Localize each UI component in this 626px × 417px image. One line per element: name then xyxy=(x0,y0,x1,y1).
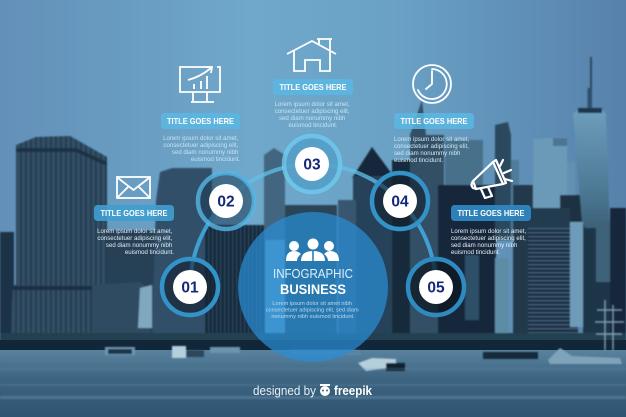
description text: sed diam nonummy nibh xyxy=(279,115,345,122)
footer: designed by freepik credit: freepik xyxy=(334,384,372,398)
description text: consectetuer adipiscing elit, xyxy=(451,235,526,242)
description text: Lorem ipsum dolor sit amet, xyxy=(163,135,239,142)
step 05 node: 05 xyxy=(427,280,445,296)
footer: designed by freepik credit xyxy=(253,384,372,398)
central description text: consectetuer adipiscing elit, sed diam xyxy=(266,308,359,314)
panel: step 04 clock xyxy=(394,65,474,164)
title pill: TITLE GOES HERE xyxy=(280,82,347,92)
step 05 node xyxy=(408,259,464,315)
icon: envelope xyxy=(117,177,150,198)
description text: Lorem ipsum dolor sit amet, xyxy=(97,228,173,235)
title pill: TITLE GOES HERE xyxy=(167,116,234,126)
description text: consectetuer adipiscing elit, xyxy=(163,142,239,149)
icon: megaphone xyxy=(472,160,512,198)
step 04 node: 04 xyxy=(391,194,409,210)
heading: business: BUSINESS xyxy=(280,281,346,297)
footer: designed by freepik credit: designed by xyxy=(253,384,317,398)
description text: euismod tincidunt. xyxy=(451,249,500,256)
panel: step 05 megaphone xyxy=(451,160,531,256)
step 01 node xyxy=(162,259,218,315)
title pill: TITLE GOES HERE xyxy=(458,208,525,218)
description text: Lorem ipsum dolor sit amet, xyxy=(451,228,526,235)
step 03 node: 03 xyxy=(303,156,321,174)
icon: house xyxy=(287,39,336,71)
description text: consectetuer adipiscing elit, xyxy=(97,235,173,242)
description text: euismod tincidunt. xyxy=(125,249,174,256)
step 02 node xyxy=(198,173,254,229)
step 01 node: 01 xyxy=(181,280,199,296)
title pill: TITLE GOES HERE xyxy=(100,208,168,218)
icon: clock xyxy=(413,65,451,103)
description text: sed diam nonummy nibh xyxy=(394,150,460,157)
description text: sed diam nonummy nibh xyxy=(172,149,238,156)
description text: Lorem ipsum dolor sit amet, xyxy=(275,101,350,108)
description text: consectetuer adipiscing elit, xyxy=(394,143,469,150)
panel: step 03 home xyxy=(273,39,353,129)
central circle: infographic business xyxy=(238,212,388,362)
title pill: TITLE GOES HERE xyxy=(400,116,468,126)
connector arc linking steps 01 to 05 xyxy=(190,164,436,287)
central description text: nonummy nibh euismod tincidunt. xyxy=(271,314,355,320)
panel: step 02 chart xyxy=(161,67,240,163)
central description text: Lorem ipsum dolor sit amet nibh xyxy=(272,301,352,307)
description text: consectetuer adipiscing elit, xyxy=(275,108,350,115)
icon: business people xyxy=(286,238,339,261)
description text: sed diam nonummy nibh xyxy=(451,242,517,249)
heading: infographic: INFOGRAPHIC xyxy=(273,266,353,281)
icon: monitor with growth chart xyxy=(180,67,220,102)
step 02 node: 02 xyxy=(217,194,235,210)
step 04 node xyxy=(372,173,428,229)
description text: sed diam nonummy nibh xyxy=(106,242,172,249)
description text: euismod tincidunt. xyxy=(288,122,338,129)
description text: Lorem ipsum dolor sit amet, xyxy=(394,136,469,143)
description text: euismod tincidunt. xyxy=(394,157,443,164)
panel: step 01 mail xyxy=(94,177,174,256)
step 03 node xyxy=(284,136,340,192)
description text: euismod tincidunt. xyxy=(191,156,240,163)
